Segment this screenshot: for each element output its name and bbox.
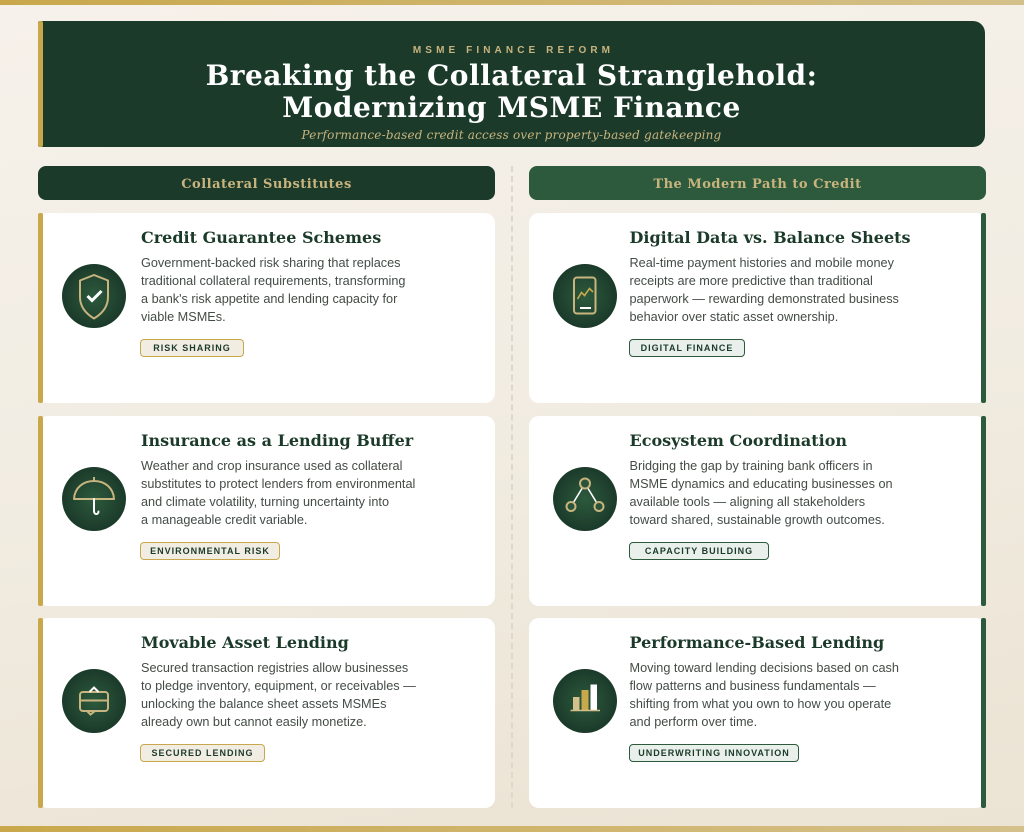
card body: flow patterns and business fundamentals — [630,679,876,693]
tag [629,744,799,762]
card body: traditional collateral requirements, transforming [141,274,405,288]
card title: Ecosystem Coordination [630,431,847,450]
subtitle: Performance-based credit access over property-based gatekeeping [302,128,721,142]
panel: ecosystem coordination [529,416,986,606]
column heading: collateral substitutes [38,166,495,200]
card body: receipts are more predictive than traditional [630,274,873,288]
panel: credit guarantee schemes [38,213,495,403]
tag [140,339,244,357]
tag [140,542,280,560]
card body: substitutes to protect lenders from environmental [141,477,415,491]
bottom accent bar [0,826,1024,832]
card body: to pledge inventory, equipment, or receivables — [141,679,416,693]
title: Breaking the Collateral Stranglehold: [206,59,817,92]
card body [141,459,415,527]
card body: viable MSMEs. [141,310,226,324]
icon: umbrella [62,467,126,531]
card body: MSME dynamics and educating businesses on [630,477,893,491]
panel: insurance as a lending buffer [38,416,495,606]
card body [630,459,893,527]
column heading: collateral substitutes: Collateral Substitutes [181,177,352,192]
card body: toward shared, sustainable growth outcomes. [630,513,885,527]
card body: behavior over static asset ownership. [630,310,838,324]
card body: and climate volatility, turning uncertainty into [141,495,389,509]
tag: DIGITAL FINANCE [641,343,733,353]
card body: Weather and crop insurance used as collateral [141,459,402,473]
card body: already own but cannot easily monetize. [141,715,367,729]
card body [630,256,899,324]
header gold accent [38,21,43,147]
card body [630,661,899,729]
icon: transfer card [62,669,126,733]
panel: digital data vs balance sheets [529,213,986,403]
card title: Movable Asset Lending [141,633,349,652]
icon: network nodes [553,467,617,531]
center dashed divider [511,166,513,808]
tag [629,339,745,357]
tag: RISK SHARING [153,343,231,353]
card title: Insurance as a Lending Buffer [141,431,413,450]
card body [141,256,405,324]
card body: Secured transaction registries allow businesses [141,661,408,675]
card title: Digital Data vs. Balance Sheets [630,228,911,247]
tag [140,744,265,762]
card body: paperwork — rewarding demonstrated business [630,292,899,306]
header banner [38,21,985,147]
card body: unlocking the balance sheet assets MSMEs [141,697,386,711]
card body: shifting from what you own to how you operate [630,697,891,711]
icon: phone with chart [553,264,617,328]
eyebrow label: MSME FINANCE REFORM [413,44,614,56]
card body: Bridging the gap by training bank officers in [630,459,873,473]
card body: available tools — aligning all stakeholders [630,495,865,509]
panel: performance-based lending [529,618,986,808]
tag: SECURED LENDING [151,748,254,758]
tag: ENVIRONMENTAL RISK [150,546,270,556]
title [206,59,817,124]
card body: a manageable credit variable. [141,513,307,527]
icon: shield [62,264,126,328]
column heading: modern path: The Modern Path to Credit [653,177,862,192]
icon: bar chart [553,669,617,733]
card body: Government-backed risk sharing that replaces [141,256,401,270]
top accent bar [0,0,1024,5]
card body: Real-time payment histories and mobile money [630,256,894,270]
card title: Performance-Based Lending [630,633,884,652]
card body: and perform over time. [630,715,757,729]
tag: CAPACITY BUILDING [645,546,753,556]
tag: UNDERWRITING INNOVATION [638,748,790,758]
title: Modernizing MSME Finance [282,91,741,124]
card body: a bank's risk appetite and lending capacity for [141,292,397,306]
tag [629,542,769,560]
panel: movable asset lending [38,618,495,808]
column heading: modern path [529,166,986,200]
card title: Credit Guarantee Schemes [141,228,381,247]
card body [141,661,416,729]
card body: Moving toward lending decisions based on cash [630,661,899,675]
